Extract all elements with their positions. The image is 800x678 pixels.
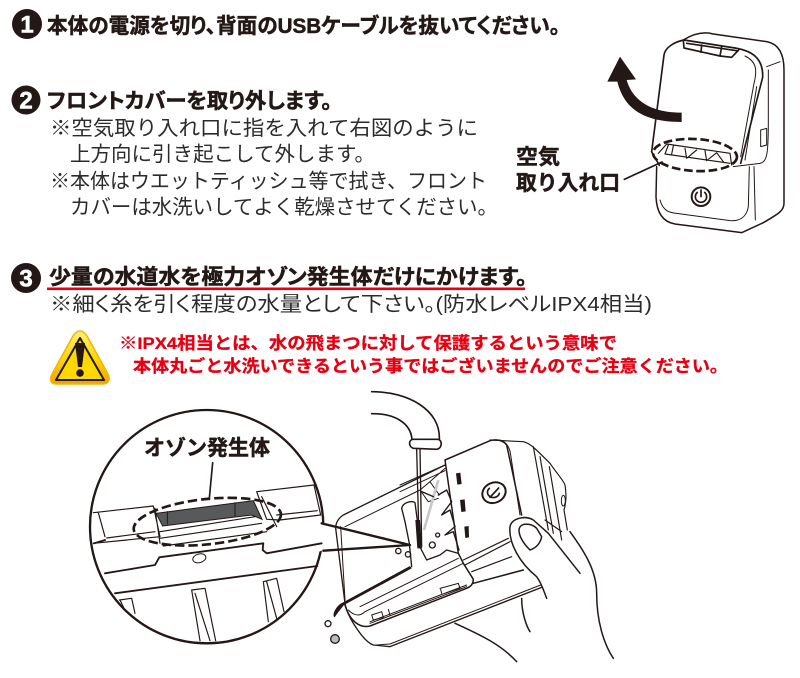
cover footer tabs xyxy=(372,583,460,620)
step 1 xyxy=(12,9,560,39)
lens circle xyxy=(90,410,323,643)
power button xyxy=(479,479,509,507)
step 1 number badge xyxy=(12,9,42,39)
step 2 number badge xyxy=(12,86,40,114)
latch teeth xyxy=(438,490,459,550)
ozone generator dark panel xyxy=(156,501,262,526)
cover detail lines xyxy=(93,485,321,546)
washing illustration xyxy=(325,392,613,662)
red warning text: ※IPX4相当とは、水の飛まつに対して保護するという意味で xyxy=(119,334,617,353)
water stream xyxy=(415,449,422,548)
step 3 xyxy=(11,263,652,316)
step 2 notes: カバーは水洗いしてよく乾燥させてください。 xyxy=(70,196,498,219)
air intake label xyxy=(516,146,620,195)
grey water reflection xyxy=(424,480,438,530)
device body xyxy=(336,465,542,647)
top vent xyxy=(683,40,739,57)
step 1 heading: 本体の電源を切り、背面のUSBケーブルを抜いてください。 xyxy=(47,14,560,38)
inner tab xyxy=(402,492,458,567)
step 3 number badge xyxy=(11,263,41,293)
dashed ellipse xyxy=(652,137,738,173)
leader line xyxy=(624,162,662,179)
red underline xyxy=(47,288,525,290)
step 3 note: ※細く糸を引く程度の水量として下さい。(防水レベルIPX4相当) xyxy=(50,293,652,316)
air intake label: 取り入れ口 xyxy=(516,172,620,195)
dashed ellipse xyxy=(131,491,283,552)
step 2 notes xyxy=(50,117,498,219)
step 2 heading: フロントカバーを取り外します。 xyxy=(47,90,332,113)
air intake slots xyxy=(658,144,732,165)
air intake label: 空気 xyxy=(516,146,560,169)
magnified detail circle xyxy=(90,410,410,643)
thick lower edge xyxy=(334,566,412,617)
red warning text xyxy=(119,334,728,376)
power button xyxy=(692,187,710,206)
step 1 number badge: 1 xyxy=(20,12,34,38)
front cover xyxy=(652,40,763,163)
step 2 notes: ※本体はウエットティッシュ等で拭き、フロント xyxy=(50,170,487,193)
ozone generator label: オゾン発生体 xyxy=(144,437,270,460)
hand xyxy=(455,518,613,662)
step 2 xyxy=(12,86,498,219)
step 2 number badge: 2 xyxy=(19,88,33,114)
red warning text: 本体丸ごと水洗いできるという事ではございませんのでご注意ください。 xyxy=(133,356,728,376)
step 3 number badge: 3 xyxy=(19,266,33,292)
water droplets xyxy=(325,533,440,643)
faucet xyxy=(372,392,441,449)
leader line xyxy=(209,463,213,498)
step 2 notes: ※空気取り入れ口に指を入れて右図のように xyxy=(50,117,478,140)
front cover xyxy=(345,440,522,626)
lift arrow xyxy=(607,57,682,122)
step 3 heading: 少量の水道水を極力オゾン発生体だけにかけます。 xyxy=(49,266,527,289)
step 2 notes: 上方向に引き起こして外します。 xyxy=(70,143,375,166)
device body outline xyxy=(656,33,784,233)
cover slots xyxy=(456,473,469,538)
device illustration with front cover lifted xyxy=(607,33,784,233)
icon: warning triangle xyxy=(51,331,109,384)
lens pointer xyxy=(317,523,410,552)
device outer shell xyxy=(490,440,567,540)
